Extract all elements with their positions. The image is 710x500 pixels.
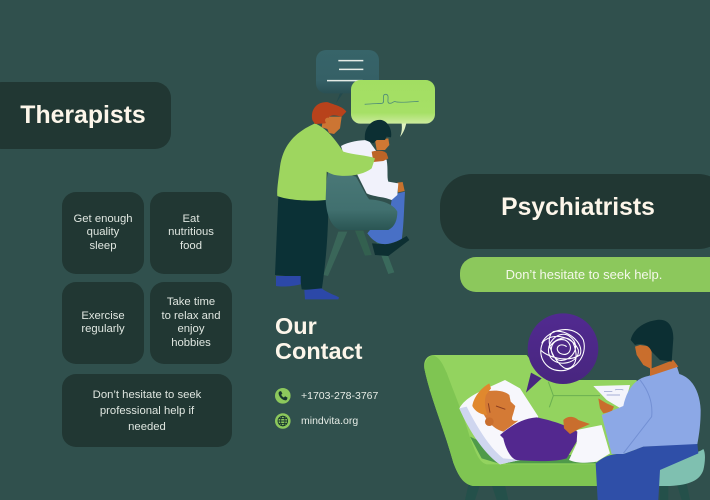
- patient body: [500, 417, 610, 463]
- psychiatrist hand: [598, 398, 614, 413]
- therapist sweater: [277, 123, 375, 201]
- illustration: psychiatrist with patient on couch: [424, 313, 705, 500]
- tip: sleep: quality: [87, 226, 119, 238]
- therapist trousers: [275, 197, 328, 291]
- speech bubble: green: [351, 80, 435, 137]
- psychiatrist trousers: [596, 443, 698, 500]
- tip: food: nutritious: [168, 226, 214, 238]
- tip: professional help: Don’t hesitate to seek: [93, 388, 201, 400]
- therapist shoes: [276, 276, 339, 299]
- thought bubble: [526, 313, 598, 393]
- tip: relax: hobbies: [171, 336, 211, 348]
- contact: website: mindvita.org: [301, 415, 358, 427]
- heading: Psychiatrists: Psychiatrists: [501, 194, 655, 220]
- heading: Therapists: [0, 82, 171, 149]
- tip: relax: [150, 282, 232, 364]
- psychiatrist head: [631, 320, 678, 376]
- banner: seek help: Don’t hesitate to seek help.: [506, 267, 662, 282]
- tip: relax: enjoy: [177, 323, 204, 335]
- tip: relax: Take time: [167, 296, 215, 308]
- tip: exercise: [62, 282, 144, 364]
- chair legs: [323, 230, 394, 276]
- heading: Psychiatrists: [440, 174, 710, 249]
- chair: [326, 172, 397, 230]
- therapist hand: [372, 151, 388, 162]
- couch legs: [465, 483, 690, 500]
- banner: seek help: [460, 257, 710, 292]
- contact: phone: +1703-278-3767: [301, 390, 378, 402]
- paper: [593, 385, 630, 410]
- tip: food: [150, 192, 232, 274]
- tip: relax: to relax and: [161, 310, 221, 322]
- heading: Our Contact: Our: [275, 313, 317, 339]
- tip: sleep: Get enough: [73, 213, 133, 225]
- tip: professional help: [62, 374, 232, 447]
- tip: exercise: regularly: [81, 323, 125, 335]
- tip: food: food: [180, 240, 202, 252]
- tip: exercise: Exercise: [81, 310, 125, 322]
- tip: sleep: sleep: [89, 240, 116, 252]
- pillow: [459, 380, 538, 464]
- tip: food: Eat: [183, 213, 199, 225]
- psychiatrist shirt: [602, 366, 701, 454]
- heading: Therapists: Therapists: [20, 102, 146, 128]
- therapist head: [312, 102, 346, 134]
- stool: [622, 449, 705, 486]
- patient: [341, 120, 405, 200]
- speech bubble: dark teal: [316, 50, 379, 103]
- icon: globe: [275, 413, 291, 429]
- illustration: therapist comforting patient: [275, 50, 435, 299]
- patient head: [472, 383, 518, 432]
- patient legs: [367, 192, 409, 256]
- tip: professional help: professional help if: [100, 404, 194, 416]
- heading: Our Contact: [275, 313, 362, 364]
- couch: [424, 355, 637, 486]
- heading: Our Contact: Contact: [275, 338, 362, 364]
- tip: professional help: needed: [128, 420, 166, 432]
- tip: sleep: [62, 192, 144, 274]
- icon: phone: [275, 388, 291, 404]
